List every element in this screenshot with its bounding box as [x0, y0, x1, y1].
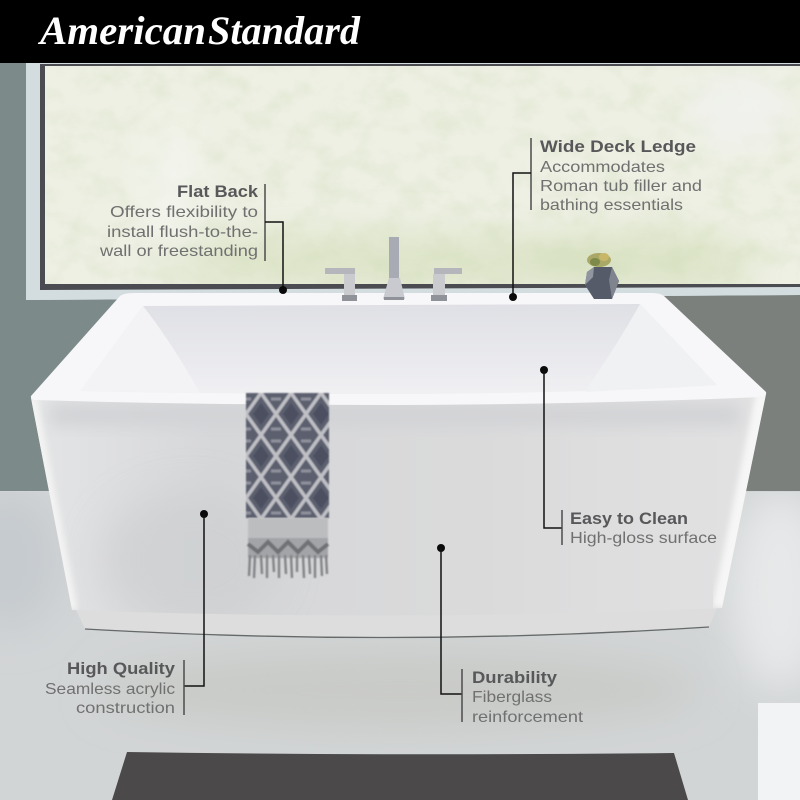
window frame [26, 63, 800, 300]
window sill [26, 287, 800, 300]
description [45, 681, 175, 717]
description: Accommodates [540, 159, 665, 176]
floor [0, 491, 800, 800]
description [99, 204, 258, 260]
plant pot [585, 253, 619, 299]
heading: Wide Deck Ledge [540, 137, 696, 156]
heading: Flat Back [177, 182, 259, 201]
left handle [325, 268, 357, 301]
description: install flush-to-the- [107, 224, 258, 241]
description: construction [76, 700, 175, 717]
description: High-gloss surface [570, 530, 717, 547]
heading: High Quality [67, 659, 176, 678]
towel fringe [248, 518, 328, 578]
callout: flat back [99, 182, 287, 294]
tub front [31, 394, 766, 616]
description: Roman tub filler and [540, 178, 702, 195]
faucet [325, 237, 462, 301]
right handle [431, 268, 462, 301]
tub basin [80, 304, 717, 394]
tub base [76, 606, 718, 638]
description: bathing essentials [540, 197, 683, 214]
description: Fiberglass [472, 689, 552, 706]
description: Offers flexibility to [110, 204, 258, 221]
towel [246, 393, 329, 578]
tub deck [31, 293, 766, 405]
window [26, 63, 800, 300]
floor highlights [0, 490, 800, 800]
description: Seamless acrylic [45, 681, 175, 698]
wall background [0, 60, 800, 500]
logo [0, 0, 800, 63]
spout [383, 237, 405, 300]
callout: durability [437, 544, 584, 726]
description [472, 689, 584, 726]
callout: high quality [45, 510, 208, 717]
right wall [650, 290, 800, 495]
callout: easy to clean [540, 366, 717, 547]
rug [112, 752, 688, 800]
callout: wide deck ledge [509, 137, 702, 301]
description: wall or freestanding [99, 243, 258, 260]
bathtub [31, 293, 766, 638]
logo: Standard [208, 8, 361, 53]
heading: Durability [472, 668, 558, 687]
description: reinforcement [472, 709, 584, 726]
heading: Easy to Clean [570, 509, 688, 528]
towel body [246, 393, 329, 518]
logo: American [37, 8, 206, 53]
foliage view [45, 66, 800, 288]
description [540, 159, 702, 214]
